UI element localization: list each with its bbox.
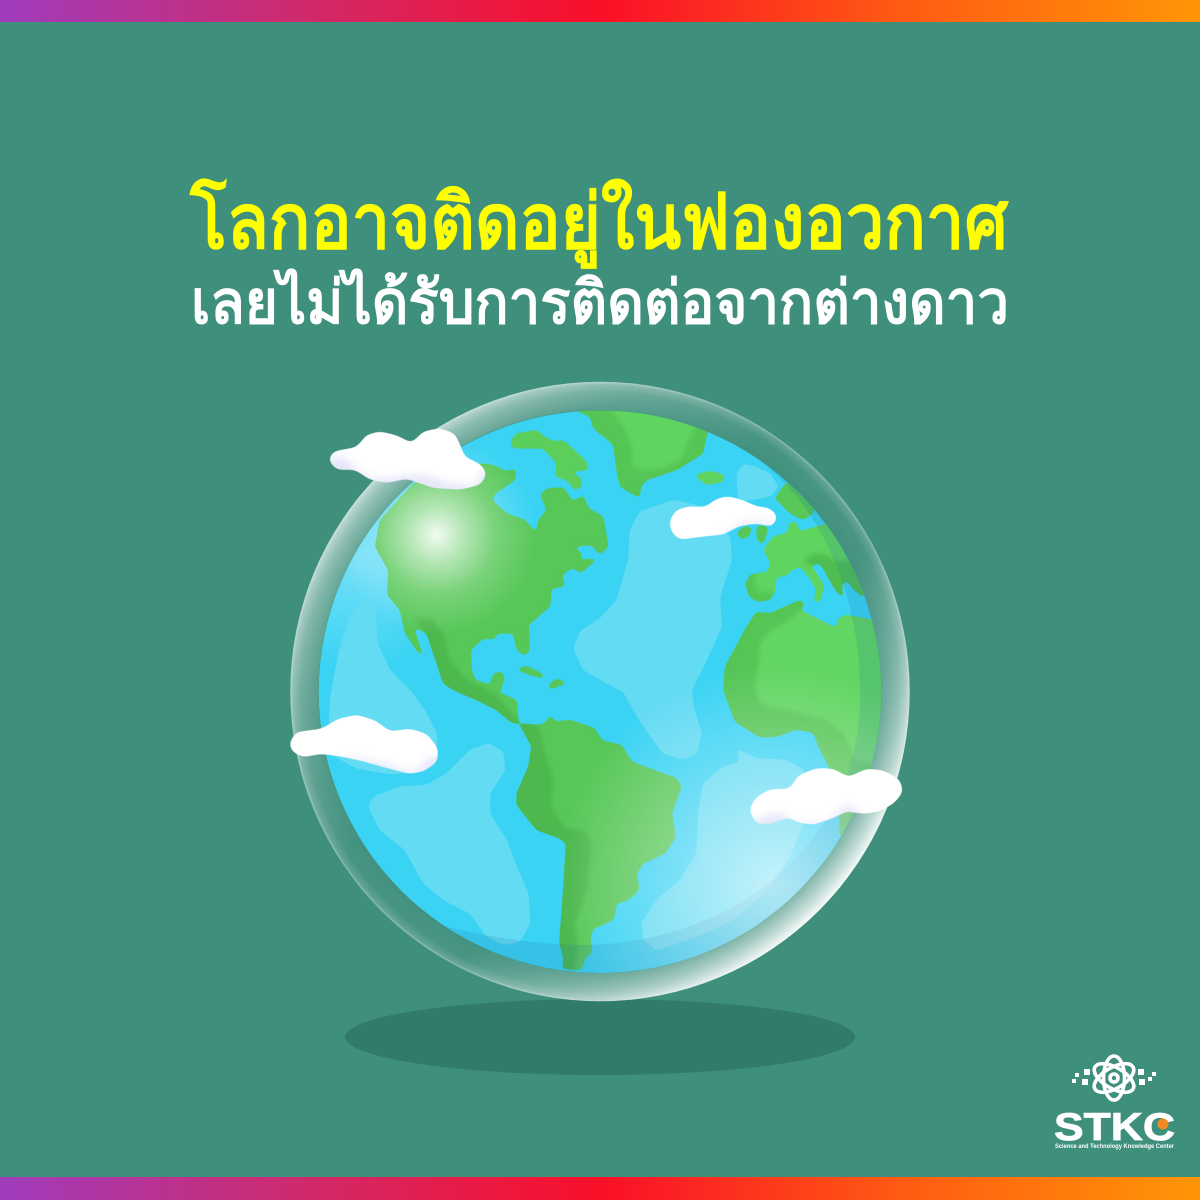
greenland light <box>612 411 694 470</box>
africa <box>723 600 893 838</box>
hispaniola <box>548 678 568 690</box>
title line 2: เลยไม่ได้รับการติดต่อจากต่างดาว <box>191 267 1009 336</box>
logo STKC <box>1054 1056 1175 1150</box>
ring base <box>290 382 910 1001</box>
cloud right <box>749 768 903 824</box>
globe inner shadow crescent <box>446 458 882 973</box>
europe <box>746 522 867 602</box>
americas dark coast <box>413 618 592 970</box>
title line 1: โลกอาจติดอยู่ในฟองอวกาศ <box>189 177 1010 269</box>
bubble ring <box>290 382 910 1001</box>
earth globe in bubble <box>290 382 910 1002</box>
top gradient bar <box>0 0 1200 22</box>
cloud left <box>289 715 438 774</box>
ocean <box>319 410 881 973</box>
africa light <box>756 608 882 763</box>
iceland <box>693 471 725 485</box>
iberia shade <box>746 573 775 602</box>
bottom gradient bar <box>0 1177 1200 1200</box>
clouds <box>289 428 903 824</box>
continents <box>375 397 893 970</box>
logo atom icon <box>1090 1056 1138 1100</box>
light ocean areas <box>329 464 810 950</box>
greenland <box>567 397 708 498</box>
arctic islands <box>510 430 588 491</box>
ground shadow <box>345 999 855 1075</box>
logo wordmark: STKC <box>1054 1106 1175 1149</box>
specular highlight <box>352 447 527 626</box>
ireland <box>757 525 768 545</box>
upper left ocean glow <box>322 482 419 652</box>
europe dark region <box>805 553 864 596</box>
ring shine <box>290 382 910 1001</box>
title <box>189 177 1010 336</box>
cloud top left <box>328 428 487 489</box>
logo tagline: Science and Technology Knowledge Center <box>1055 1144 1175 1150</box>
british isles <box>737 527 752 540</box>
north and south america <box>375 463 682 970</box>
logo orange dot <box>1158 1118 1168 1130</box>
scandinavia <box>775 482 815 520</box>
caribbean islands <box>519 666 543 678</box>
cloud top right <box>669 496 778 539</box>
lower right highlight <box>573 685 880 973</box>
globe <box>318 410 882 973</box>
logo pixel squares <box>1072 1069 1156 1085</box>
